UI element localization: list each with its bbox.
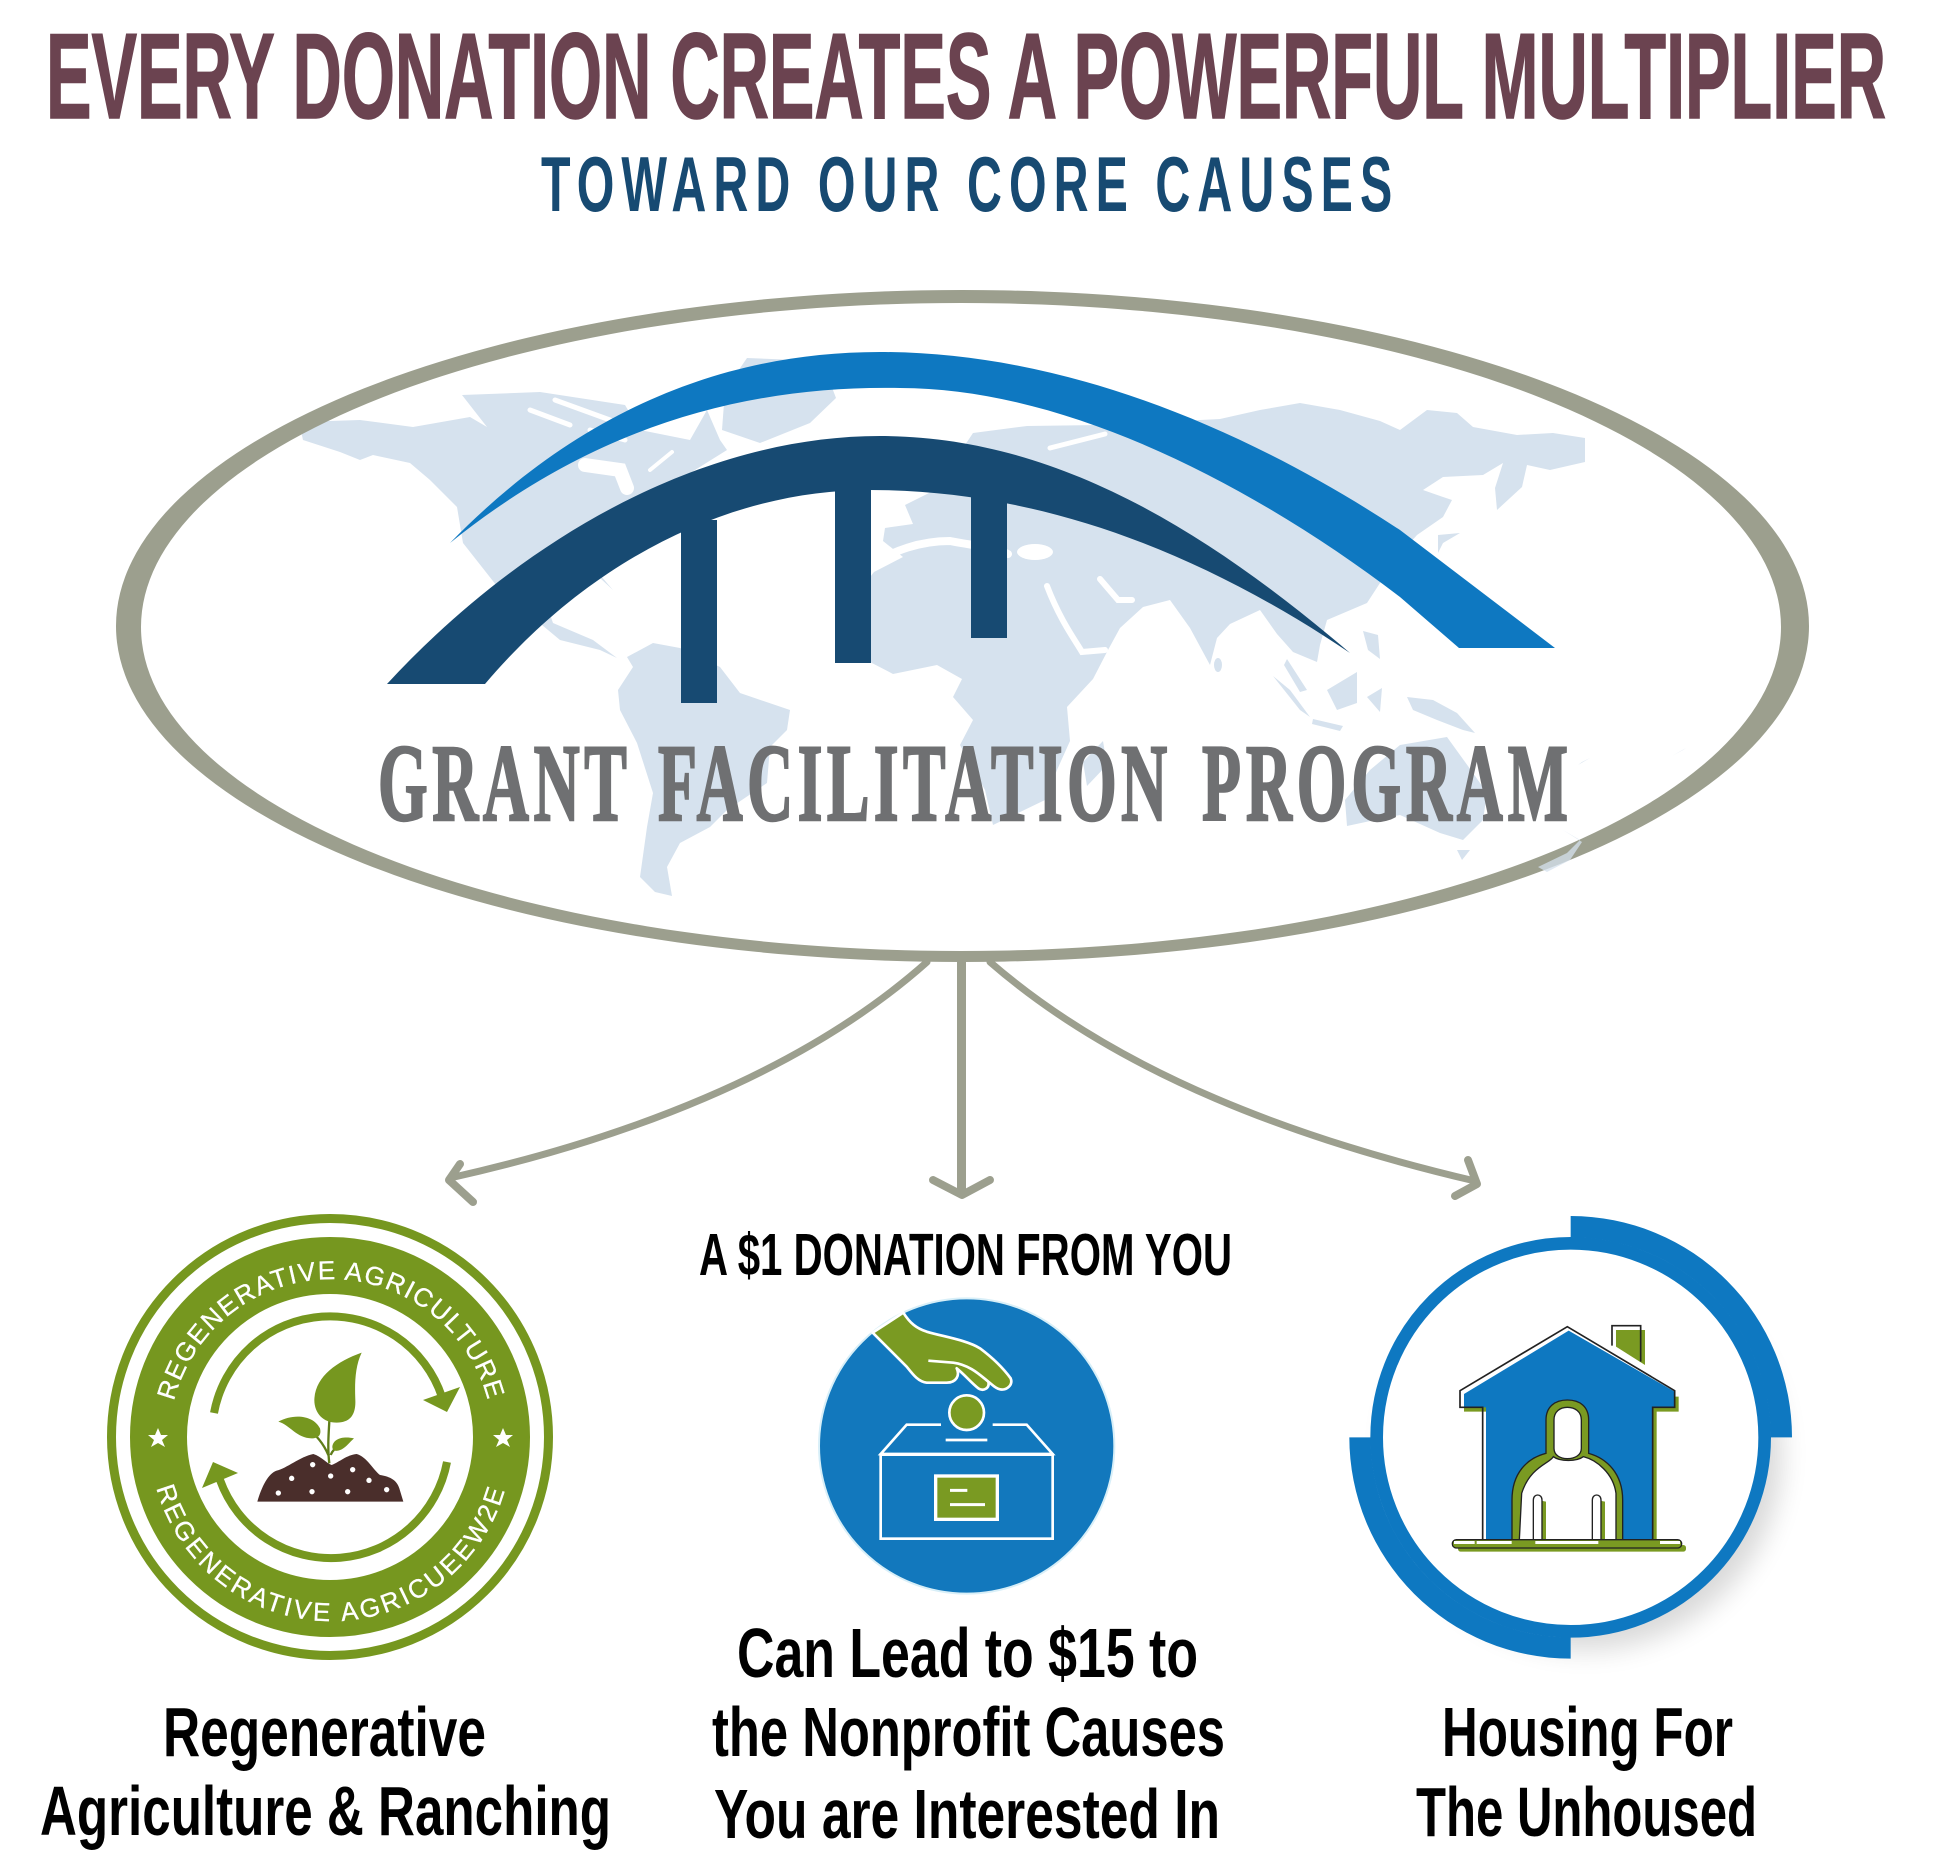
soft shadow [1388, 1257, 1782, 1650]
new zealand over ring [1538, 830, 1582, 872]
subtitle: TOWARD OUR CORE CAUSES [541, 140, 1392, 228]
text: can lead to $15: Can Lead to $15 to [737, 1614, 1198, 1692]
text: can lead to $15 [712, 1614, 1225, 1853]
badge top text: REGENERATIVE AGRICULTURE [157, 1261, 505, 1400]
text: regenerative agriculture and ranching [40, 1693, 611, 1850]
text: regenerative agriculture and ranching: Agriculture & Ranching [40, 1772, 611, 1850]
text: regenerative agriculture and ranching: Regenerative [163, 1693, 486, 1771]
badge stars [148, 1428, 513, 1447]
text: housing for the unhoused: The Unhoused [1416, 1773, 1757, 1851]
program name: GRANT [378, 723, 627, 844]
text: can lead to $15: the Nonprofit Causes [712, 1693, 1225, 1771]
arrow: to regenerative agriculture [449, 962, 927, 1202]
ground line [1458, 1545, 1686, 1552]
badge rings [112, 1218, 548, 1656]
icon: regenerative agriculture badge [107, 1214, 553, 1660]
house fill [1464, 1397, 1679, 1543]
hand [873, 1313, 1011, 1390]
icon: donation box [819, 1298, 1114, 1594]
badge bottom text: REGENERATIVE AGRICUEEW2E [156, 1484, 505, 1622]
map seas and bays [530, 400, 1132, 652]
bridge logo: dark arc and pillars [387, 436, 1350, 703]
ring [1377, 1243, 1765, 1631]
text: housing for the unhoused [1416, 1693, 1757, 1851]
panel: grant facilitation program oval [116, 290, 1809, 962]
icon: housing [1349, 1216, 1792, 1659]
blue disc [819, 1298, 1114, 1594]
text: housing for the unhoused: Housing For [1442, 1693, 1733, 1771]
badge cycle arrows [214, 1316, 447, 1558]
program name: PROGRAM [1202, 723, 1568, 844]
arrow: to housing [990, 962, 1477, 1196]
program name [378, 723, 1568, 844]
world map [299, 358, 1686, 896]
coin [949, 1395, 984, 1430]
bridge logo: light arc [450, 352, 1555, 648]
box label [936, 1476, 997, 1519]
box [881, 1425, 1053, 1539]
chimney [1616, 1330, 1645, 1365]
house outline [1460, 1327, 1675, 1540]
oval ring [116, 290, 1809, 962]
ring thick quadrants [1349, 1216, 1792, 1659]
text: can lead to $15: You are Interested In [714, 1775, 1220, 1853]
program name: FACILITATION [658, 723, 1167, 844]
text: a $1 donation from you: A $1 DONATION FROM YOU [699, 1222, 1232, 1288]
plant in soil [257, 1353, 403, 1502]
person [1512, 1400, 1623, 1540]
arrow: to center donation [933, 960, 990, 1195]
